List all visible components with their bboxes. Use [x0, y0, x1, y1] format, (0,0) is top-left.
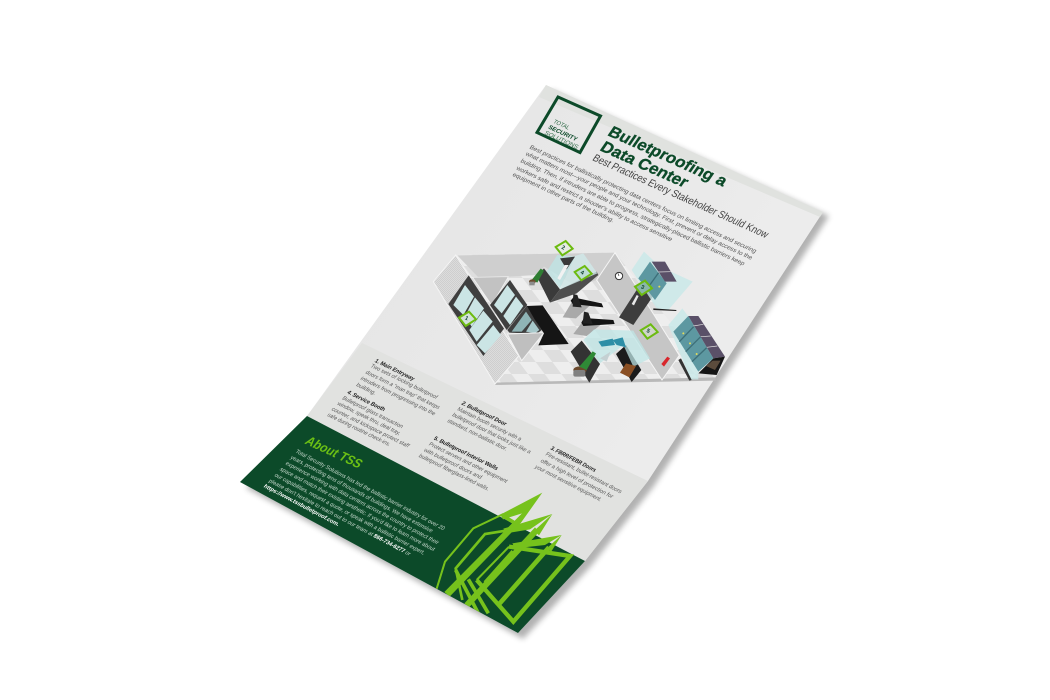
item 3: FBRR/FEBR doors: your most sensitive equipment.	[533, 464, 603, 503]
item 3: FBRR/FEBR doors	[533, 446, 623, 503]
item 5: bulletproof interior walls: 5. Bulletproof Interior Walls	[432, 436, 499, 472]
marker 1	[459, 312, 476, 326]
item 1: main entryway	[354, 358, 441, 417]
about paragraph	[262, 449, 446, 557]
intro paragraph: workers safe and restrict a shooter's ability to access sensitive	[514, 165, 674, 243]
back wall	[457, 253, 615, 287]
inner partition wall	[473, 277, 508, 305]
black floor mat	[527, 305, 569, 345]
upper server racks	[632, 252, 693, 311]
about paragraph: our capabilities, request a quote, or speak with a ballistic barrier expert,	[273, 473, 426, 556]
item 1: main entryway: doors form a "man trap" that keeps	[364, 370, 441, 411]
item 4: service booth: window, speak thru, deal tray,	[335, 401, 402, 437]
turnstile barrier two	[573, 312, 615, 336]
fire extinguisher	[661, 357, 670, 367]
intro paragraph: what matters most—your people and your technology. First, prevent or delay access to the	[523, 151, 754, 262]
item 5: bulletproof interior walls	[417, 436, 509, 493]
floor	[457, 253, 715, 384]
green building graphic	[437, 493, 570, 622]
marker 4	[575, 266, 592, 280]
item 3: FBRR/FEBR doors: offer a high level of protection for	[539, 458, 614, 500]
item 2: bulletproof door: bulletproof door that looks just like a	[450, 412, 533, 456]
green footer panel	[240, 416, 585, 633]
about heading: About TSS	[302, 434, 366, 471]
marker 1: 1	[464, 316, 469, 322]
intro paragraph: equipment in other parts of the building.	[511, 172, 615, 224]
marker 5	[641, 324, 658, 339]
item 1: main entryway: intruders from progressing into the	[359, 376, 437, 417]
service booth	[537, 253, 598, 303]
booth plant	[529, 269, 544, 285]
about paragraph: Total Security Solutions has led the ballistic barrier industry for over 20	[294, 449, 446, 532]
logo: SOLUTIONS	[543, 131, 579, 151]
subtitle: Best Practices Every Stakeholder Should Know	[590, 153, 771, 241]
main entry window frame	[448, 275, 504, 356]
paper sheet	[240, 85, 823, 633]
item 4: service booth: 4. Service Booth	[345, 390, 387, 413]
item 4: service booth: counter, and kickspace protect staff	[330, 407, 411, 449]
intro paragraph: Best practices for ballistically protecting data centers focus on limiting access and securing	[528, 145, 757, 255]
about paragraph: years, protecting tens of thousands of buildings. We have extensive	[289, 455, 434, 534]
item 2: bulletproof door: Maintain booth security with a	[455, 407, 523, 443]
item 4: service booth: Bulletproof glass transaction	[340, 396, 404, 430]
item 2: bulletproof door: 2. Bulletproof Door	[460, 401, 508, 428]
paper shadow	[246, 90, 829, 639]
title: Data Center	[597, 139, 692, 191]
tiled left wall	[433, 255, 519, 384]
lower booth plant	[573, 351, 596, 377]
floor plan illustration	[433, 241, 725, 385]
marker 3	[635, 281, 652, 295]
bulletproof door	[619, 287, 655, 325]
logo: SECURITY	[546, 125, 578, 143]
item 4: service booth	[325, 390, 411, 449]
item 5: bulletproof interior walls: Protect servers and other equipment	[427, 442, 509, 485]
text band background	[307, 343, 648, 561]
item 2: bulletproof door: standard, non-ballistic door.	[445, 418, 509, 452]
item 1: main entryway: 1. Main Entryway	[373, 358, 416, 383]
item 1: main entryway: building.	[354, 382, 378, 397]
about paragraph: experience working with data centers across the country to protect their	[284, 461, 440, 546]
item 5: bulletproof interior walls: with bulletproof doors and	[421, 447, 483, 481]
item 1: main entryway: Two sets of locking bulletproof	[369, 363, 439, 401]
about paragraph: https://www.tssbulletproof.com.	[262, 484, 341, 528]
marker 3: 3	[640, 285, 645, 291]
item 3: FBRR/FEBR doors: Fire-resistant, bullet-resistant doors	[544, 452, 623, 495]
about paragraph: space and match their existing aesthetic. If you'd like to learn more about	[278, 467, 436, 553]
intro paragraph: building. Then, if intruders are able to progress, strategically-placed ballistic barriers keep	[519, 159, 746, 268]
header band	[539, 85, 823, 217]
logo	[537, 97, 600, 152]
marker 2: 2	[560, 245, 566, 252]
logo: TOTAL	[551, 119, 571, 132]
wall clock	[615, 272, 623, 280]
marker 2	[556, 241, 573, 255]
floor slab edge	[494, 377, 716, 385]
right long wall	[597, 253, 679, 380]
item 3: FBRR/FEBR doors: 3. FBRR/FEBR Doors	[549, 446, 597, 474]
turnstile barrier one	[563, 294, 603, 318]
item 5: bulletproof interior walls: bulletproof fiberglass-lined walls.	[417, 453, 491, 493]
about paragraph: please don't hesitate to reach out to our team at 866-734-6277 or	[267, 478, 412, 557]
marker 4: 4	[579, 270, 585, 277]
inner entry window frame	[490, 280, 542, 334]
item 4: service booth: safe during routine check-ins.	[325, 412, 392, 448]
title: Bulletproofing a	[604, 124, 731, 190]
marker 5: 5	[645, 328, 651, 335]
lower booth	[571, 329, 650, 383]
lower server racks	[668, 308, 725, 381]
front partition wall	[507, 333, 544, 361]
